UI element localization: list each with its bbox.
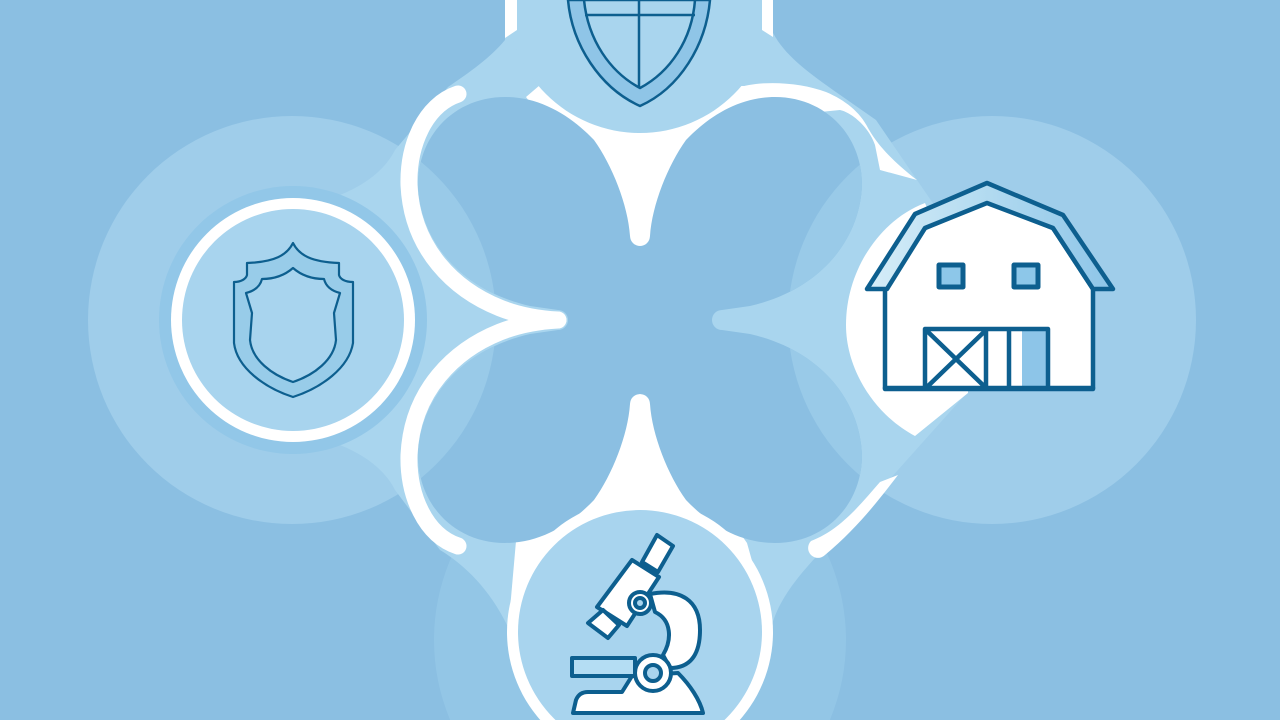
icon: microscope: [572, 535, 703, 713]
barn windows: [939, 265, 1038, 287]
white shape: bottom wedge: [508, 394, 772, 632]
connector shape: [340, 0, 965, 625]
medallion white ring: [171, 198, 415, 442]
bottom white ring: [507, 499, 773, 720]
medallion outer ring: [159, 186, 427, 454]
white arc: upper right: [700, 83, 917, 180]
flower of four lobes: [418, 97, 862, 543]
barn door: [885, 329, 1093, 388]
halo tint over lobes: [418, 162, 862, 478]
icon: top shield with cross: [568, 0, 710, 106]
white arc: lower right: [808, 475, 898, 558]
halo: right: [788, 116, 1196, 524]
barn roof: [867, 183, 1113, 289]
white arc: lower left: [409, 320, 558, 546]
top disc: [507, 0, 773, 133]
icon: left shield: [234, 243, 353, 397]
halo: bottom: [434, 434, 846, 720]
left medallion: [159, 186, 427, 454]
barn walls: [885, 202, 1093, 389]
white arc: upper left: [409, 94, 558, 320]
bottom inner disc: [518, 510, 762, 720]
halo: left: [88, 116, 496, 524]
white shape: top wedge: [526, 85, 745, 246]
top white bars: [505, 0, 773, 38]
medallion inner disc: [182, 209, 404, 431]
bottom medallion: [507, 499, 773, 720]
icon: barn: [867, 183, 1113, 389]
white shape: right disc behind barn: [846, 203, 968, 436]
